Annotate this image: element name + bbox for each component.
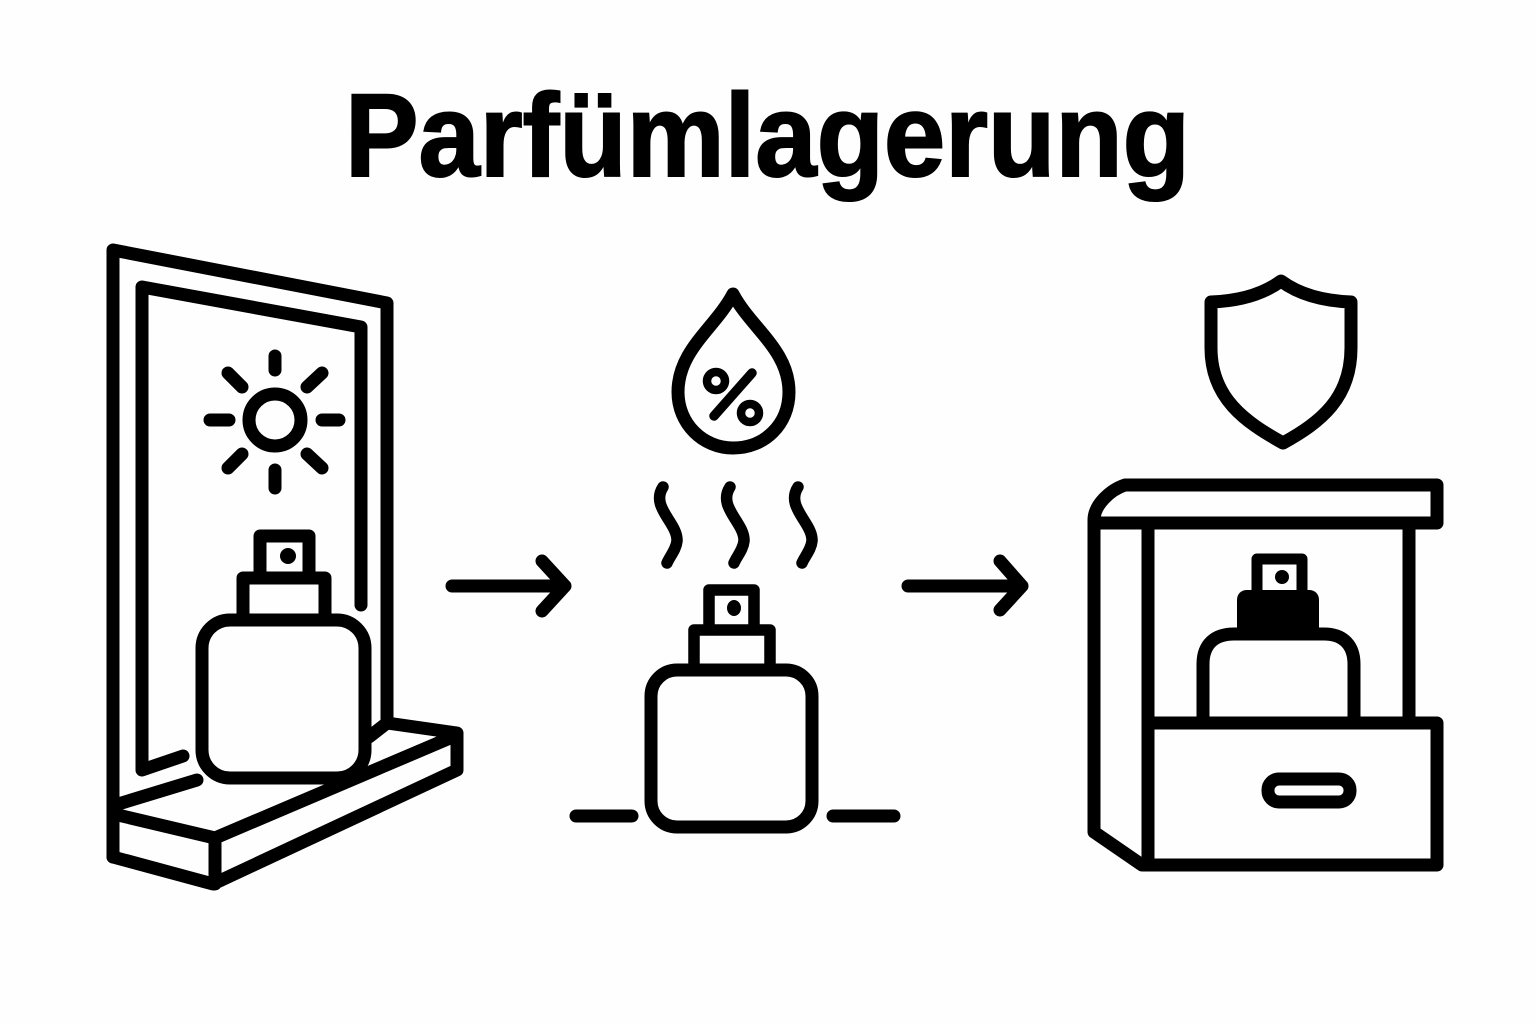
icon: shield (1211, 281, 1351, 443)
icon: sun (210, 356, 339, 488)
windowsill (113, 723, 457, 884)
surface lines (576, 810, 894, 822)
icon: perfume bottle on windowsill (202, 536, 365, 778)
title: Parfümlagerung (345, 70, 1190, 202)
arrow: humidity to cabinet (908, 561, 1022, 610)
panel: window with sun (113, 250, 457, 884)
icon: perfume bottle (651, 590, 812, 827)
arrow: window to humidity (452, 561, 565, 611)
icon: vapor waves (660, 487, 812, 563)
panel: humidity (576, 294, 894, 827)
icon: perfume bottle in cabinet (1203, 559, 1354, 718)
cabinet (1094, 485, 1437, 865)
icon: water drop with percent (678, 294, 789, 448)
window frame (113, 250, 387, 857)
panel: protected cabinet (1094, 281, 1437, 865)
cabinet drawer handle (1268, 779, 1350, 802)
